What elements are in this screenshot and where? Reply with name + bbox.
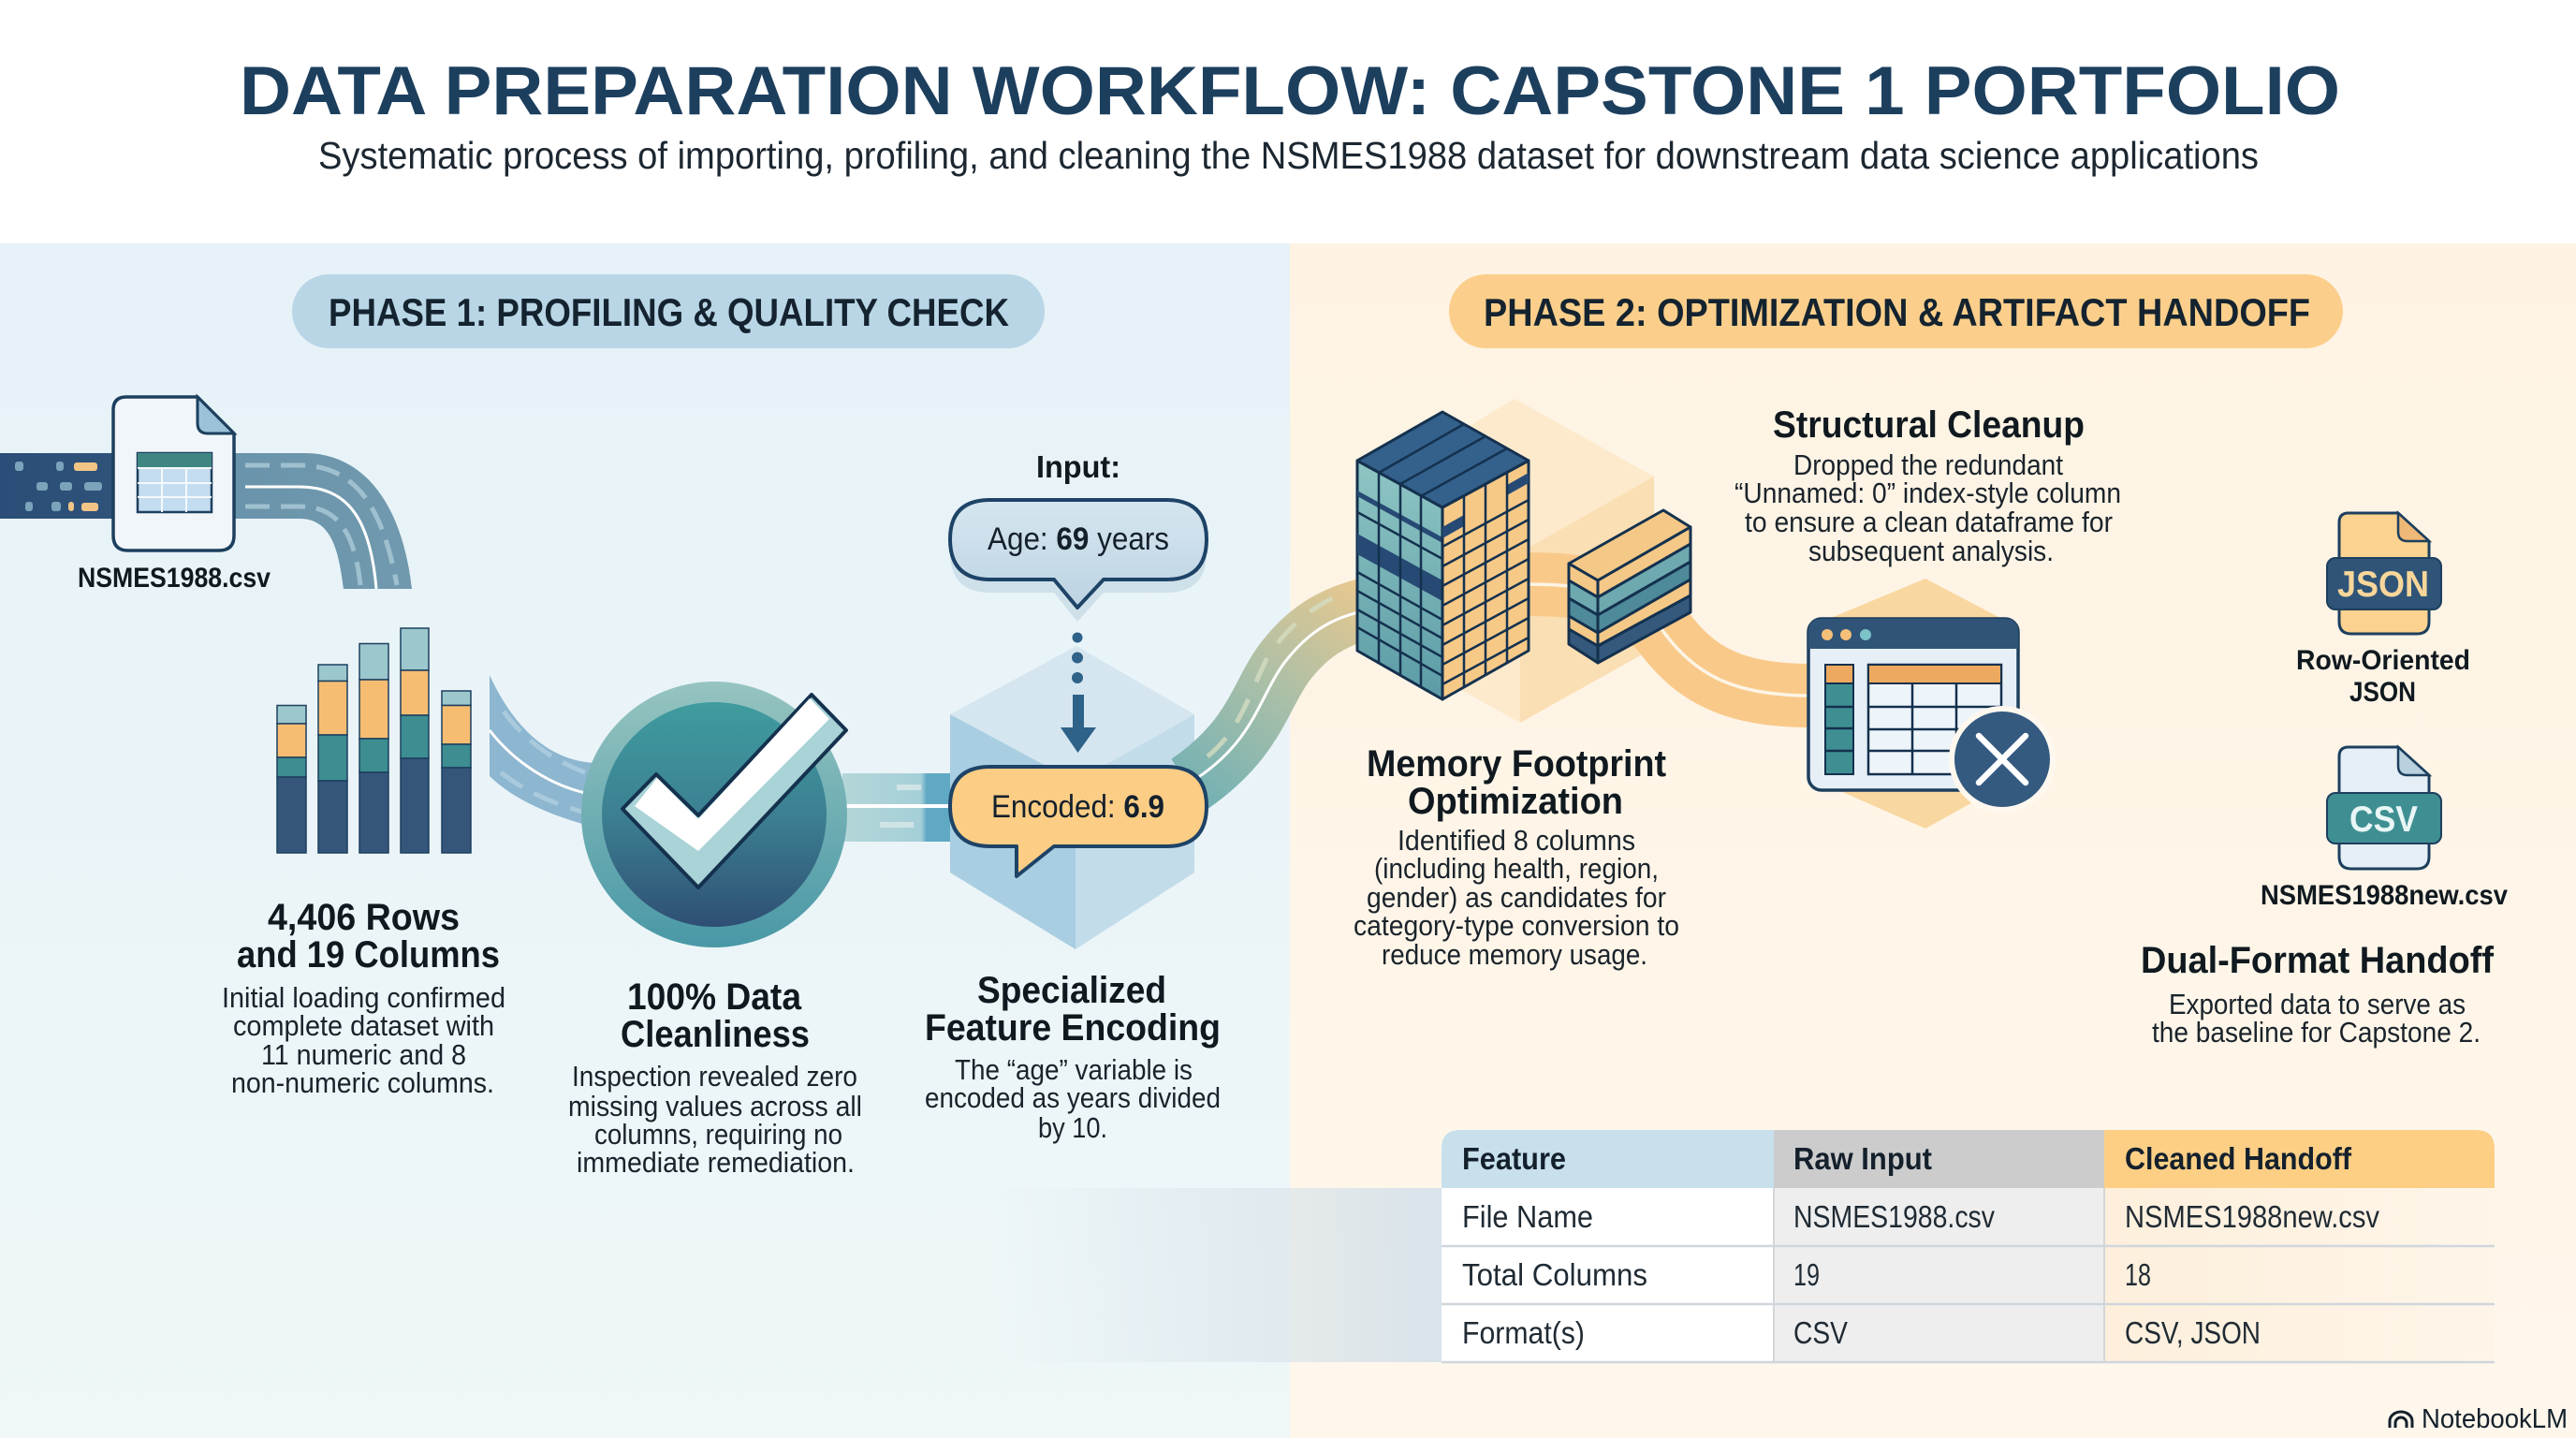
row: file name: NSMES1988.csv <box>1793 1199 1995 1234</box>
row: file name: NSMES1988new.csv <box>2125 1199 2379 1234</box>
icon: encoding cube <box>950 646 1194 949</box>
label: row-oriented json <box>2296 645 2470 708</box>
callout: encoded bubble <box>950 767 1207 876</box>
arrow: dots and down arrow <box>1061 633 1096 753</box>
icon: csv file <box>2327 747 2441 869</box>
text block: dual-format handoff <box>2141 940 2495 1049</box>
icon: pale hexagon behind data tower <box>1385 399 1654 723</box>
table body fills <box>1442 1188 2495 1362</box>
text block: structural cleanup: to ensure a clean dataframe for <box>1745 506 2113 538</box>
text block: data cleanliness: 100% Data <box>627 976 802 1018</box>
row: total columns <box>1462 1257 2151 1292</box>
text block: structural cleanup: “Unnamed: 0” index-style column <box>1734 477 2121 509</box>
icon: json file <box>2327 513 2441 634</box>
text block: rows and columns: complete dataset with <box>233 1009 494 1042</box>
heading: phase 2 pill: PHASE 2: OPTIMIZATION & ARTIFACT HANDOFF <box>1484 290 2310 334</box>
row: formats: CSV <box>1793 1315 1848 1350</box>
arrow: data road from source file <box>0 453 412 589</box>
text block: memory footprint optimization: category-type conversion to <box>1354 909 1679 942</box>
callout: age bubble <box>950 500 1207 622</box>
text block: rows and columns: non-numeric columns. <box>231 1066 494 1099</box>
arrow: road to memory optimization <box>1189 592 1367 785</box>
label: source file name: NSMES1988.csv <box>78 563 271 594</box>
arrow: road from bars to check <box>490 675 599 829</box>
table header row: Feature <box>1462 1141 1566 1176</box>
title: DATA PREPARATION WORKFLOW: CAPSTONE 1 PORTFOLIO <box>240 53 2340 129</box>
icon: source csv file <box>113 397 234 550</box>
callout: input label: Input: <box>1036 449 1120 484</box>
table header row: Cleaned Handoff <box>2125 1141 2352 1176</box>
arrow: road between tower, stack and window <box>1516 584 1811 696</box>
text block: specialized feature encoding: Feature Encoding <box>925 1007 1221 1049</box>
bar 2 <box>318 665 347 853</box>
row: formats: Format(s) <box>1462 1315 1585 1350</box>
text block: specialized feature encoding <box>925 970 1221 1144</box>
table header row: Raw Input <box>1793 1141 1932 1176</box>
row: file name: File Name <box>1462 1199 1593 1234</box>
text block: memory footprint optimization <box>1354 743 1679 971</box>
text block: data cleanliness: missing values across all <box>568 1090 862 1123</box>
text block: structural cleanup: Dropped the redundant <box>1793 448 2063 481</box>
chart: stacked bars <box>277 628 471 853</box>
text block: memory footprint optimization: Identified 8 columns <box>1398 824 1635 857</box>
text block: memory footprint optimization: (including health, region, <box>1374 852 1659 885</box>
icon: compact stacked block <box>1569 510 1690 663</box>
text block: data cleanliness: Cleanliness <box>621 1014 810 1055</box>
text block: specialized feature encoding: The “age” variable is <box>955 1053 1193 1086</box>
icon: data tower <box>1357 412 1529 699</box>
text block: specialized feature encoding: encoded as years divided <box>925 1081 1221 1114</box>
row: total columns: 19 <box>1793 1257 1820 1292</box>
text block: memory footprint optimization: Optimization <box>1408 781 1623 822</box>
text block: specialized feature encoding: by 10. <box>1038 1111 1107 1144</box>
text block: dual-format handoff: the baseline for Capstone 2. <box>2152 1016 2481 1049</box>
row: formats <box>1462 1315 2261 1350</box>
bar 1 <box>277 706 306 853</box>
text block: structural cleanup <box>1734 404 2121 567</box>
label: new csv file name: NSMES1988new.csv <box>2261 880 2508 911</box>
panel: phase 2 background <box>1290 243 2576 1438</box>
text block: dual-format handoff: Exported data to serve as <box>2169 988 2466 1020</box>
text block: dual-format handoff: Dual-Format Handoff <box>2141 940 2495 981</box>
bar 4 <box>401 628 429 853</box>
tower right face <box>1442 461 1529 699</box>
row: total columns: Total Columns <box>1462 1257 1647 1292</box>
panel: phase 1 background <box>0 243 1290 1438</box>
callout: age bubble: Age: 69 years <box>988 521 1169 557</box>
text block: rows and columns <box>222 897 505 1099</box>
text block: structural cleanup: Structural Cleanup <box>1773 404 2085 446</box>
text block: memory footprint optimization: reduce memory usage. <box>1382 938 1647 971</box>
text block: rows and columns: 4,406 Rows <box>268 897 460 938</box>
table: raw input vs cleaned handoff <box>1442 1130 2495 1362</box>
bar 5 <box>442 691 471 853</box>
text block: rows and columns: 11 numeric and 8 <box>261 1038 466 1071</box>
heading: phase 2 pill <box>1449 274 2343 348</box>
heading: phase 1 pill: PHASE 1: PROFILING & QUALITY CHECK <box>329 290 1009 334</box>
label: row-oriented json: JSON <box>2349 677 2416 708</box>
icon: data cleanliness check badge <box>581 682 847 947</box>
text block: structural cleanup: subsequent analysis. <box>1808 535 2054 567</box>
text block: specialized feature encoding: Specialized <box>977 970 1166 1011</box>
text block: data cleanliness: Inspection revealed zero <box>572 1060 857 1093</box>
arrow: road from check to encoding <box>842 773 959 842</box>
icon: dataframe window with dropped column <box>1808 579 2056 829</box>
row: total columns: 18 <box>2125 1257 2151 1292</box>
subtitle: Systematic process of importing, profiling, and cleaning the NSMES1988 dataset for downstream data science applications <box>318 134 2259 177</box>
text block: data cleanliness <box>568 976 862 1179</box>
icon: csv file: CSV <box>2349 800 2418 840</box>
text block: rows and columns: and 19 Columns <box>237 934 500 976</box>
text block: data cleanliness: columns, requiring no <box>594 1118 842 1151</box>
text block: memory footprint optimization: Memory Footprint <box>1367 743 1666 785</box>
text block: memory footprint optimization: gender) as candidates for <box>1367 881 1666 914</box>
label: row-oriented json: Row-Oriented <box>2296 645 2470 676</box>
bar 3 <box>359 644 388 853</box>
heading: phase 1 pill <box>292 274 1045 348</box>
row: file name <box>1462 1199 2379 1234</box>
callout: encoded bubble: Encoded: 6.9 <box>991 789 1164 825</box>
watermark: NotebookLM: NotebookLM <box>2422 1404 2568 1434</box>
table header row <box>1442 1130 2495 1188</box>
row: formats: CSV, JSON <box>2125 1315 2261 1350</box>
tower left face <box>1357 461 1442 699</box>
text block: data cleanliness: immediate remediation. <box>577 1146 855 1179</box>
text block: rows and columns: Initial loading confirmed <box>222 981 505 1014</box>
icon: json file: JSON <box>2337 565 2429 605</box>
tower top face <box>1357 412 1529 507</box>
decorative fade into comparison table <box>992 1188 1442 1362</box>
